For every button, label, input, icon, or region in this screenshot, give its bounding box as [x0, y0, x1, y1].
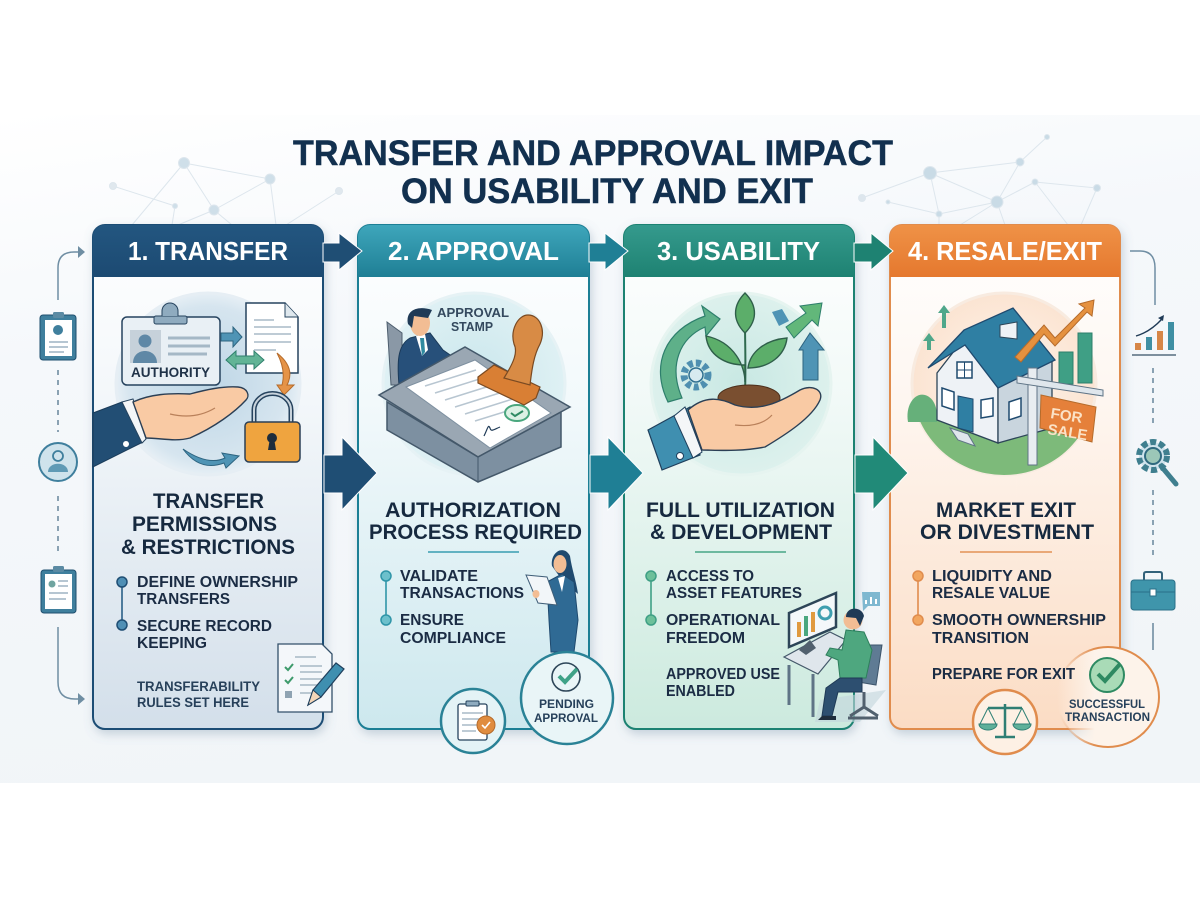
icon: clipboard chart: [40, 312, 76, 360]
bullet list: [646, 568, 802, 647]
header: 2. approval: 2. APPROVAL: [388, 236, 559, 266]
illustration: authority handoff: AUTHORITY: [131, 365, 210, 380]
arrow: approval to usability top: [589, 233, 628, 270]
icon: growth chart: [1132, 315, 1176, 355]
background: [0, 115, 1200, 783]
bullet list: OPERATIONAL: [666, 612, 780, 629]
icon: gear and magnifier: [1139, 442, 1176, 484]
bullet list: KEEPING: [137, 635, 207, 652]
panel: usability: [624, 225, 886, 729]
illustration: house for sale: SALE: [1046, 421, 1089, 444]
illustration: woman reviewing paper: [526, 550, 578, 652]
network decoration right: [858, 134, 1100, 225]
badge: pending approval: APPROVAL: [534, 711, 598, 725]
bullet list: SECURE RECORD: [137, 618, 272, 635]
bullet list: RESALE VALUE: [932, 585, 1050, 602]
illustration: house for sale: FOR: [1049, 405, 1084, 427]
arrow: approval to usability lower: [590, 437, 643, 510]
icon: person cycle: [39, 443, 77, 481]
note: transferability rules: TRANSFERABILITY: [137, 679, 260, 694]
panel heading: [369, 499, 582, 544]
badge: scales of balance: [973, 690, 1037, 754]
left side icons and connectors: [39, 246, 85, 705]
header: 1. transfer: 1. TRANSFER: [128, 236, 288, 266]
bullet list: ACCESS TO: [666, 568, 754, 585]
icon: checklist and pen: [278, 644, 344, 712]
panel: approval: [358, 225, 589, 729]
badge: clipboard review: [441, 689, 505, 753]
note: approved use enabled: [666, 666, 780, 700]
illustration: analyst at computer: [784, 592, 886, 722]
bullet list: TRANSFERS: [137, 591, 230, 608]
bullet list: TRANSACTIONS: [400, 585, 524, 602]
title: [293, 134, 893, 211]
arrow: transfer to approval top: [323, 233, 362, 270]
bullet list: DEFINE OWNERSHIP: [137, 574, 298, 591]
illustration: plant in hand: [648, 293, 831, 475]
network decoration left: [110, 158, 342, 225]
arrow: usability to resale lower: [855, 437, 908, 510]
bullet list: LIQUIDITY AND: [932, 568, 1052, 585]
note: prepare for exit: PREPARE FOR EXIT: [932, 666, 1075, 683]
note: transferability rules: RULES SET HERE: [137, 695, 249, 710]
bullet list: [913, 568, 1106, 647]
header: 4. resale/exit: [890, 225, 1120, 277]
bullet list: [381, 568, 524, 647]
arrow: transfer to approval lower: [324, 437, 377, 510]
panel heading: FULL UTILIZATION: [646, 499, 835, 522]
illustration: approval stamp desk: STAMP: [451, 319, 493, 334]
badge: pending approval: [521, 652, 613, 744]
panel heading: MARKET EXIT: [936, 499, 1076, 522]
header: 4. resale/exit: 4. RESALE/EXIT: [908, 236, 1102, 266]
bullet list: TRANSITION: [932, 630, 1029, 647]
arrow: usability to resale top: [854, 233, 893, 270]
bullet list: SMOOTH OWNERSHIP: [932, 612, 1106, 629]
title: ON USABILITY AND EXIT: [401, 172, 813, 211]
bullet list: VALIDATE: [400, 568, 478, 585]
badge: successful transaction: TRANSACTION: [1065, 710, 1150, 724]
title: TRANSFER AND APPROVAL IMPACT: [293, 134, 893, 173]
header: 2. approval: [358, 225, 589, 277]
bullet list: ASSET FEATURES: [666, 585, 802, 602]
icon: briefcase: [1131, 572, 1175, 610]
panel heading: PROCESS REQUIRED: [369, 521, 582, 544]
header: 3. usability: 3. USABILITY: [657, 236, 820, 266]
panel heading: TRANSFER: [153, 490, 264, 513]
illustration: approval stamp desk: [379, 293, 570, 482]
bullet list: COMPLIANCE: [400, 630, 506, 647]
badge: successful transaction: [1057, 647, 1159, 747]
illustration: authority handoff: [93, 293, 300, 475]
badge: pending approval: PENDING: [539, 697, 594, 711]
illustration: house for sale: [900, 293, 1110, 480]
note: transferability rules: [137, 679, 260, 710]
right side icons and connectors: [1130, 251, 1176, 650]
panel: transfer: [93, 225, 344, 729]
bullet list: [117, 574, 298, 652]
header: 3. usability: [624, 225, 854, 277]
panel heading: AUTHORIZATION: [385, 499, 561, 522]
badge: successful transaction: SUCCESSFUL: [1069, 697, 1145, 711]
panel heading: OR DIVESTMENT: [920, 521, 1094, 544]
panel heading: [646, 499, 835, 544]
panel heading: & DEVELOPMENT: [650, 521, 832, 544]
panel heading: & RESTRICTIONS: [121, 536, 295, 559]
panel heading: [920, 499, 1094, 544]
bullet list: FREEDOM: [666, 630, 745, 647]
note: approved use enabled: APPROVED USE: [666, 666, 780, 683]
icon: checklist clipboard: [41, 566, 76, 613]
panel heading: [121, 490, 295, 559]
header: 1. transfer: [93, 225, 323, 277]
bullet list: ENSURE: [400, 612, 464, 629]
illustration: approval stamp desk: APPROVAL: [437, 305, 509, 320]
panel heading: PERMISSIONS: [132, 513, 277, 536]
panel: resale and exit: [890, 225, 1120, 729]
note: approved use enabled: ENABLED: [666, 683, 735, 700]
